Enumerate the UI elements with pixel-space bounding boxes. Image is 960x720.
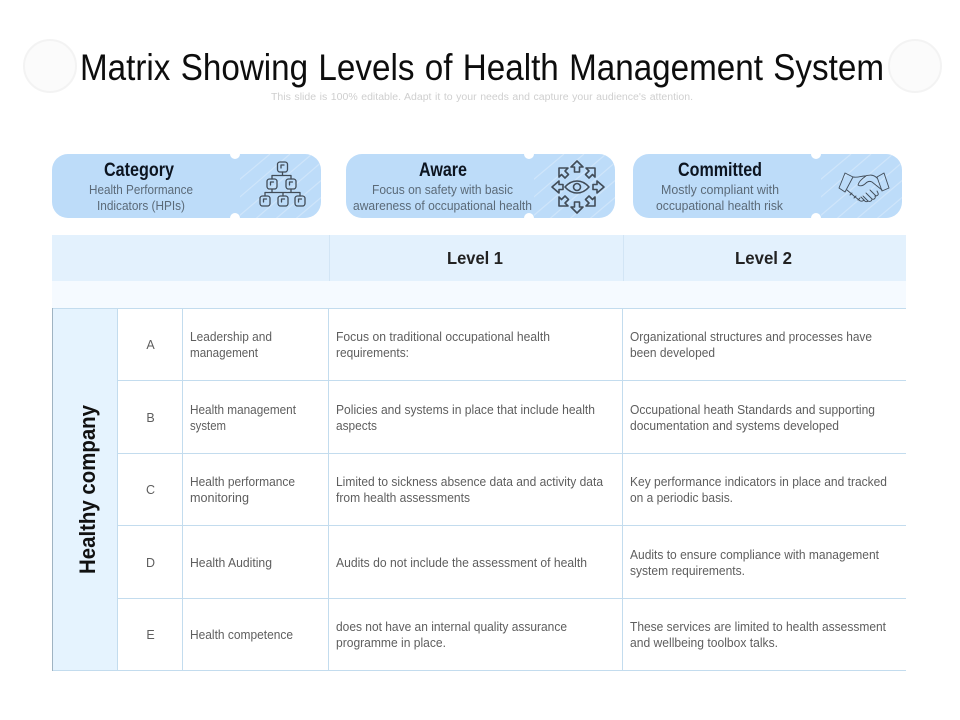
text: committed description: [656, 183, 784, 213]
panel: category card: [52, 154, 324, 222]
row B: Health management: [190, 403, 296, 417]
row E: These services are limited to health assessment: [630, 620, 886, 634]
row D: D: [146, 556, 155, 570]
heading: category: Category: [104, 160, 174, 181]
row B: Policies and systems in place that include health: [336, 403, 595, 417]
row C: [146, 475, 887, 505]
row E: [146, 620, 886, 650]
row A: been developed: [630, 346, 715, 360]
heading: level 2: Level 2: [735, 248, 792, 268]
row B: Occupational heath Standards and supporting: [630, 403, 875, 417]
row B: documentation and systems developed: [630, 419, 839, 433]
text: aware description: awareness of occupational health: [353, 199, 532, 213]
text: category description: [89, 183, 193, 213]
text: category description: Health Performance: [89, 183, 193, 197]
subtitle: This slide is 100% editable. Adapt it to your needs and capture your audience's attention.: [271, 92, 693, 103]
row C: on a periodic basis.: [630, 491, 733, 505]
row A: A: [146, 338, 155, 352]
table: levels matrix: [52, 235, 906, 671]
panel: committed card: [633, 154, 905, 222]
row E: and wellbeing toolbox talks.: [630, 636, 778, 650]
decorative circle: left: [24, 40, 76, 92]
row C: Key performance indicators in place and tracked: [630, 475, 887, 489]
row D: Audits to ensure compliance with management: [630, 548, 880, 562]
decorative circle: right: [889, 40, 941, 92]
header row: [52, 235, 906, 308]
row B: aspects: [336, 419, 377, 433]
row C: Limited to sickness absence data and activity data: [336, 475, 603, 489]
row A: Leadership and: [190, 330, 272, 344]
row A: Organizational structures and processes have: [630, 330, 872, 344]
text: aware description: Focus on safety with basic: [372, 183, 513, 197]
side label: healthy company: [52, 308, 117, 671]
icon: handshake: [839, 173, 889, 202]
panel: aware card: [346, 154, 618, 222]
title: Matrix Showing Levels of Health Management System: [80, 47, 884, 88]
row E: E: [146, 628, 155, 642]
row E: programme in place.: [336, 636, 446, 650]
row D: Audits do not include the assessment of health: [336, 556, 587, 570]
row B: [146, 403, 875, 433]
row D: system requirements.: [630, 564, 745, 578]
row B: B: [146, 411, 155, 425]
row A: Focus on traditional occupational health: [336, 330, 550, 344]
text: category description: Indicators (HPIs): [97, 199, 185, 213]
row A: requirements:: [336, 346, 409, 360]
row B: system: [190, 419, 226, 433]
heading: level 1: Level 1: [447, 248, 503, 268]
icon: eye with arrows: [552, 161, 604, 213]
row E: does not have an internal quality assurance: [336, 620, 567, 634]
heading: aware: Aware: [419, 160, 467, 181]
row A: [146, 330, 872, 360]
icon: org chart: [260, 162, 305, 206]
text: aware description: [353, 183, 532, 213]
row C: Health performance: [190, 475, 295, 489]
row C: C: [146, 483, 155, 497]
row D: Health Auditing: [190, 556, 272, 570]
heading: committed: Committed: [678, 160, 762, 181]
text: committed description: Mostly compliant with: [661, 183, 779, 197]
text: committed description: occupational health risk: [656, 199, 784, 213]
row E: Health competence: [190, 628, 293, 642]
row C: from health assessments: [336, 491, 470, 505]
row A: management: [190, 346, 258, 360]
row C: monitoring: [190, 491, 249, 505]
side label: healthy company: Healthy company: [75, 404, 100, 574]
row D: [146, 548, 880, 578]
